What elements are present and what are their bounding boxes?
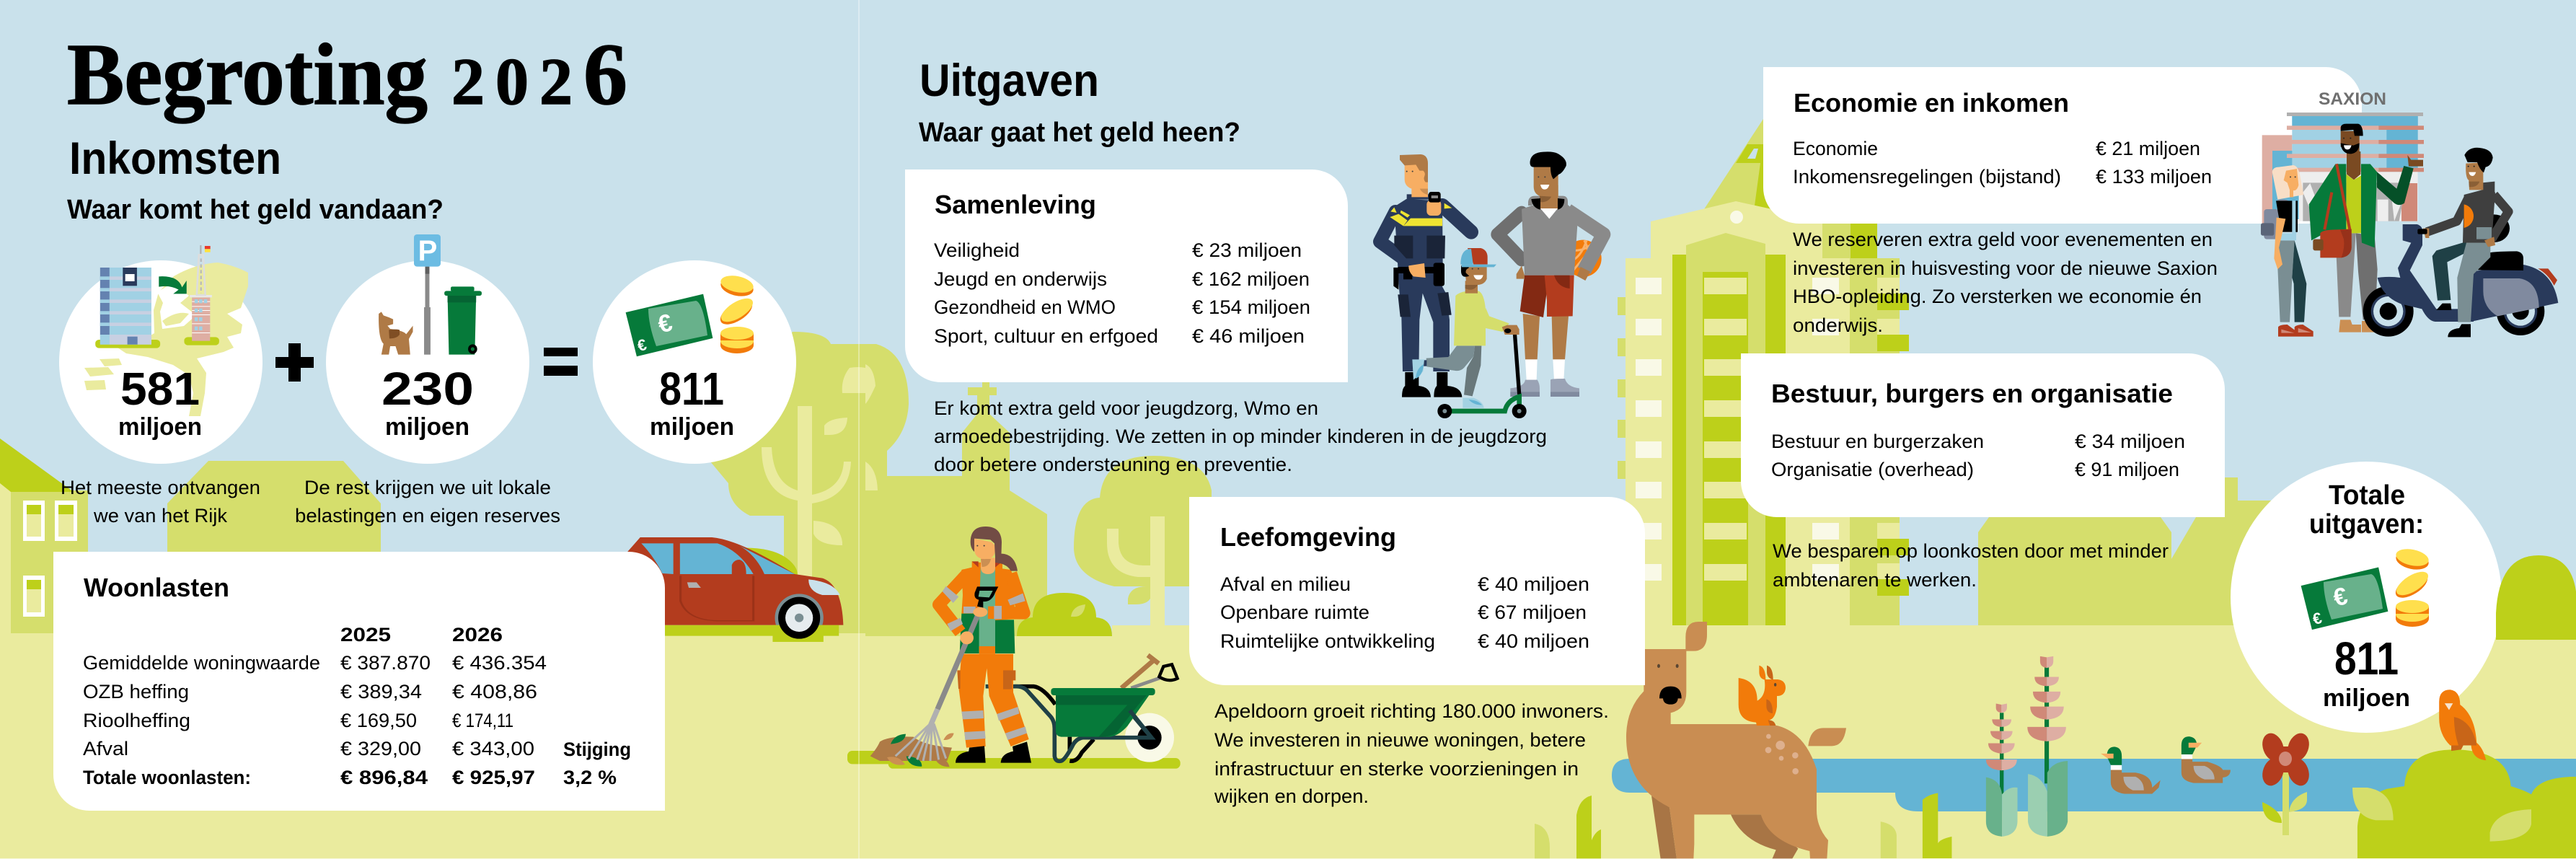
red flower xyxy=(2259,730,2313,835)
panel: Samenleving: € 154 miljoen xyxy=(1192,296,1310,318)
panel: Leefomgeving: Leefomgeving xyxy=(1220,522,1396,552)
panel: Bestuur, burgers en organisatie: Organisatie (overhead) xyxy=(1771,459,1974,480)
illustration: houses right of the central tower xyxy=(1978,477,2286,631)
panel: Samenleving: Samenleving xyxy=(935,190,1096,219)
caption: lokale belastingen: De rest krijgen we uit lokale xyxy=(304,477,551,498)
icon: parking sign, dog and green bin xyxy=(379,234,482,355)
table: Woonlasten: € 169,50 xyxy=(340,710,417,731)
text block: Bestuur: We besparen op loonkosten door met minder xyxy=(1773,540,2169,562)
bird xyxy=(2439,690,2486,760)
man xyxy=(2309,124,2423,332)
panel: Bestuur, burgers en organisatie: Bestuur en burgerzaken xyxy=(1771,431,1984,452)
panel: Leefomgeving: Ruimtelijke ontwikkeling xyxy=(1220,630,1435,652)
text block: Economie: onderwijs. xyxy=(1793,314,1883,336)
squirrel xyxy=(1739,666,1786,726)
table: Woonlasten: € 387.870 xyxy=(340,652,431,674)
circle: Rijk income xyxy=(59,260,263,464)
text block: Samenleving xyxy=(934,397,1547,475)
panel: Samenleving: € 23 miljoen xyxy=(1192,239,1302,261)
panel: Economie en inkomen: Economie en inkomen xyxy=(1794,88,2069,118)
illustration: bush with bird xyxy=(2352,690,2576,858)
panel: Economie en inkomen: € 21 miljoen xyxy=(2096,138,2200,159)
caption: lokale belastingen: belastingen en eigen reserves xyxy=(295,505,560,527)
text block: Leefomgeving: Apeldoorn groeit richting 180.000 inwoners. xyxy=(1214,700,1609,722)
table: Woonlasten: Totale woonlasten: xyxy=(83,767,251,788)
value: 230 miljoen: 230 xyxy=(381,363,474,415)
duck left xyxy=(2101,746,2161,794)
total expenditure text: miljoen xyxy=(2323,684,2410,712)
panel: Economie en inkomen xyxy=(1793,88,2212,188)
text block: Leefomgeving: infrastructuur en sterke voorzieningen in xyxy=(1214,758,1579,780)
value: 811 miljoen: 811 xyxy=(659,363,724,415)
title xyxy=(67,26,627,123)
panel: Samenleving: € 162 miljoen xyxy=(1192,268,1310,290)
panel: Bestuur, burgers en organisatie: Bestuur, burgers en organisatie xyxy=(1771,379,2173,408)
total expenditure text xyxy=(2309,480,2424,712)
circle: local income xyxy=(326,260,529,464)
value: 230 miljoen xyxy=(381,363,474,441)
title: Begroting xyxy=(67,26,428,123)
table: Woonlasten: € 343,00 xyxy=(452,738,534,759)
text block: Economie: We reserveren extra geld voor evenementen en xyxy=(1793,229,2213,250)
table: Woonlasten xyxy=(83,573,631,788)
panel: Economie en inkomen: € 133 miljoen xyxy=(2096,166,2212,188)
illustration: left house with windows xyxy=(0,439,381,633)
table: Woonlasten: € 408,86 xyxy=(452,681,537,702)
table: Woonlasten: € 436.354 xyxy=(452,652,547,674)
icon: banknote and coins xyxy=(625,273,757,357)
lupin right xyxy=(2027,656,2068,837)
panel: Leefomgeving xyxy=(1220,522,1589,652)
panel: Bestuur, burgers en organisatie: € 34 miljoen xyxy=(2075,431,2185,452)
caption: lokale belastingen xyxy=(295,477,560,527)
text block: Leefomgeving: We investeren in nieuwe woningen, betere xyxy=(1214,729,1586,751)
section heading: Uitgaven: Waar gaat het geld heen? xyxy=(919,118,1240,148)
icon: banknote and coins: € xyxy=(655,309,675,339)
panel: Samenleving: Sport, cultuur en erfgoed xyxy=(934,325,1158,347)
duck right xyxy=(2182,736,2231,783)
text block: Economie xyxy=(1793,229,2218,336)
icon: parking sign, dog and green bin: P xyxy=(418,235,437,267)
table: Woonlasten: 2025 xyxy=(340,624,391,646)
text block: Economie: investeren in huisvesting voor de nieuwe Saxion xyxy=(1793,257,2218,279)
table: Woonlasten: 2026 xyxy=(452,624,503,646)
text block: Bestuur: ambtenaren te werken. xyxy=(1773,569,1977,591)
text block: Samenleving: armoedebestrijding. We zetten in op minder kinderen in de jeugdzorg xyxy=(934,426,1547,447)
panel: Leefomgeving: Openbare ruimte xyxy=(1220,602,1369,623)
total expenditure text: uitgaven: xyxy=(2309,509,2424,539)
ground xyxy=(0,625,2576,859)
value: 811 miljoen xyxy=(650,363,734,441)
illustration: central tower block and spire xyxy=(1618,119,1909,631)
panel: Leefomgeving: Afval en milieu xyxy=(1220,573,1351,595)
section heading: Inkomsten: Inkomsten xyxy=(69,133,281,184)
total expenditure text: Totale xyxy=(2329,480,2405,511)
illustration: tall grass xyxy=(1535,796,1601,859)
icon: banknote and coins: € xyxy=(635,335,648,355)
icon: government building with arrow and town hall tower xyxy=(95,245,219,348)
value: 581 miljoen xyxy=(118,363,202,441)
panel: Samenleving: Jeugd en onderwijs xyxy=(934,268,1107,290)
table: Woonlasten: Gemiddelde woningwaarde xyxy=(83,652,320,674)
plus sign xyxy=(275,343,314,382)
illustration: houses left of the central tower xyxy=(710,332,1212,636)
text block: Samenleving: door betere ondersteuning en preventie. xyxy=(934,454,1292,475)
illustration: red car xyxy=(607,537,843,642)
icon: banknote and coins in total circle: € xyxy=(2330,582,2350,612)
table: Woonlasten: Stijging xyxy=(563,739,631,760)
title: 2026 xyxy=(451,26,627,123)
section heading: Inkomsten: Waar komt het geld vandaan? xyxy=(67,195,444,225)
table: Woonlasten: Woonlasten xyxy=(84,573,229,602)
girl xyxy=(2261,165,2313,337)
table: Woonlasten: € 896,84 xyxy=(340,767,428,788)
panel: Samenleving: Gezondheid en WMO xyxy=(934,296,1116,318)
lupin left xyxy=(1986,703,2018,837)
illustration: right bush behind circle xyxy=(2496,555,2576,640)
teen xyxy=(1498,151,1603,397)
cards: information panels xyxy=(53,67,2362,811)
panel: Samenleving xyxy=(934,190,1310,347)
illustration: Saxion building, students and scooter: SAXION xyxy=(2319,89,2386,109)
caption: Rijk: we van het Rijk xyxy=(93,505,227,527)
boy xyxy=(1412,248,1527,418)
value: 230 miljoen: miljoen xyxy=(385,413,469,441)
value: 581 miljoen: 581 xyxy=(120,363,200,415)
table: Woonlasten: Rioolheffing xyxy=(83,710,190,731)
text block: Leefomgeving xyxy=(1214,700,1609,807)
panel: Bestuur, burgers en organisatie: € 91 miljoen xyxy=(2075,459,2179,480)
text block: Leefomgeving: wijken en dorpen. xyxy=(1214,785,1369,807)
table: Woonlasten: € 174,11 xyxy=(452,710,513,731)
section heading: Uitgaven xyxy=(919,56,1240,148)
table: Woonlasten: 3,2 % xyxy=(563,767,617,788)
illustration: pond water xyxy=(1612,759,2576,811)
table: Woonlasten: € 329,00 xyxy=(340,738,421,759)
value: 811 miljoen: miljoen xyxy=(650,413,734,441)
value: 581 miljoen: miljoen xyxy=(118,413,202,441)
right circle: totale uitgaven xyxy=(2231,462,2502,733)
illustration: Saxion building, students and scooter xyxy=(2261,89,2558,337)
table: Woonlasten: Afval xyxy=(83,738,128,759)
panel: Economie en inkomen: Economie xyxy=(1793,138,1878,159)
map of the Netherlands xyxy=(84,263,248,416)
illustration: deer with squirrel xyxy=(1626,622,1846,859)
panel: Economie en inkomen: Inkomensregelingen (bijstand) xyxy=(1793,166,2061,188)
section heading: Uitgaven: Uitgaven xyxy=(919,56,1099,106)
table: Woonlasten: € 925,97 xyxy=(452,767,535,788)
panel: Samenleving: € 46 miljoen xyxy=(1192,325,1305,347)
equals sign xyxy=(544,348,578,376)
panel: Leefomgeving: € 40 miljoen xyxy=(1478,630,1589,652)
total expenditure text: 811 xyxy=(2334,633,2399,684)
table: Woonlasten: OZB heffing xyxy=(83,681,189,702)
caption: Rijk: Het meeste ontvangen xyxy=(61,477,260,498)
section heading: Inkomsten xyxy=(67,133,444,225)
text block: Economie: HBO-opleiding. Zo versterken we economie én xyxy=(1793,286,2202,307)
icon: banknote and coins in total circle xyxy=(2300,546,2432,630)
table: Woonlasten: € 389,34 xyxy=(340,681,422,702)
panel: Bestuur, burgers en organisatie xyxy=(1771,379,2185,480)
panel: Leefomgeving: € 40 miljoen xyxy=(1478,573,1589,595)
illustration: police officer, boy on scooter, teen with basketball xyxy=(1380,151,1603,418)
panel: Samenleving: Veiligheid xyxy=(934,239,1020,261)
text block: Bestuur xyxy=(1773,540,2169,591)
panel: Leefomgeving: € 67 miljoen xyxy=(1478,602,1587,623)
caption: Rijk xyxy=(61,477,260,527)
icon: banknote and coins in total circle: € xyxy=(2311,609,2324,628)
text block: Samenleving: Er komt extra geld voor jeugdzorg, Wmo en xyxy=(934,397,1318,419)
illustration: street worker with rake and wheelbarrow xyxy=(847,527,1181,769)
illustration: plants and ducks xyxy=(1881,656,2231,858)
circle: total income xyxy=(593,260,796,464)
scooter with rider xyxy=(2363,148,2558,337)
